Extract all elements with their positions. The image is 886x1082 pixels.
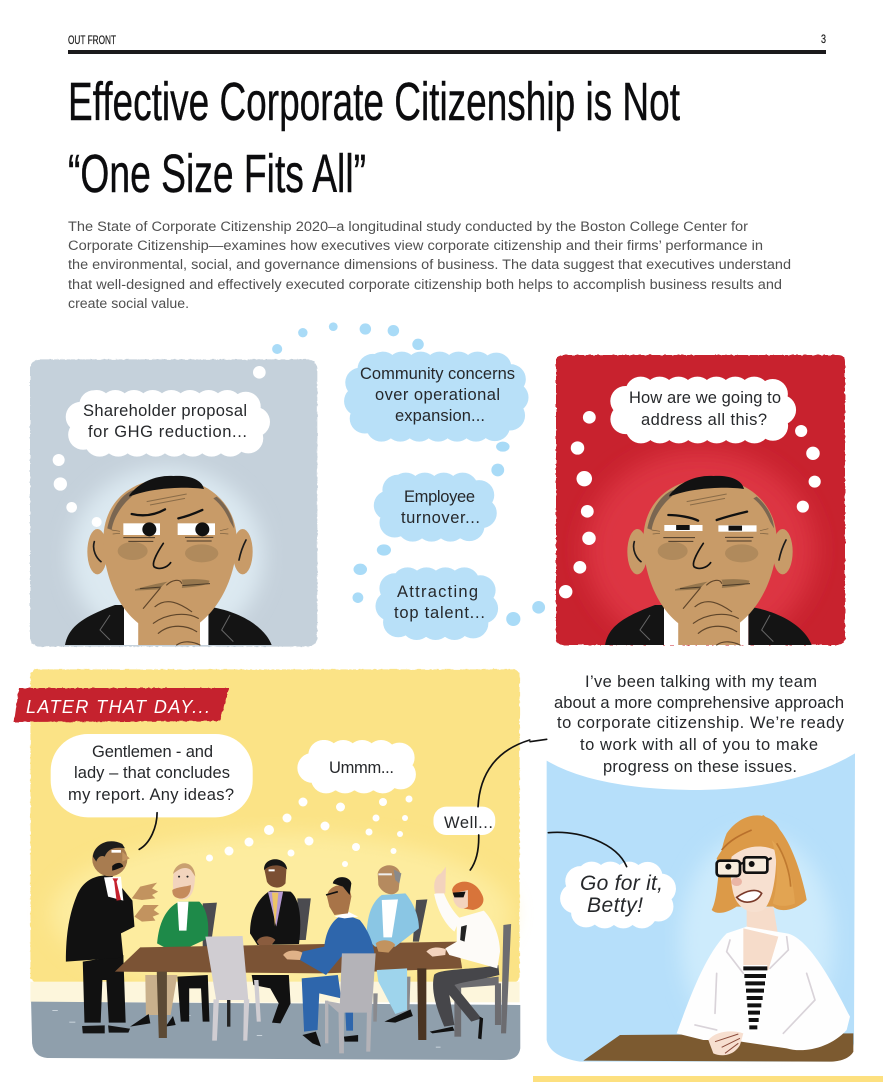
intro text block: Corporate Citizenship—examines how executives view corporate citizenship and their firms’ performance in (68, 238, 763, 253)
panel: blue thought clouds (272, 322, 545, 626)
panel: Betty at the desk: to corporate citizenship. We’re ready (557, 714, 845, 732)
panel: red executive stressed: How are we going to (629, 389, 781, 407)
panel: blue thought clouds: Attracting (397, 583, 478, 601)
blue thought dots (272, 322, 545, 626)
thought dots (559, 411, 821, 598)
bubble tail (139, 813, 157, 849)
panel: yellow meeting room: Ummm... (329, 759, 394, 777)
intro text block: that well-designed and effectively executed corporate citizenship both helps to accomplish business results and (68, 277, 782, 292)
cloud: community concerns (359, 367, 513, 427)
panel: red executive stressed: address all this? (641, 411, 767, 429)
intro text block: create social value. (68, 296, 189, 311)
panel: blue thought clouds: Employee (404, 488, 475, 506)
panel: Betty at the desk: progress on these issues. (603, 758, 797, 776)
title: “One Size Fits All” (68, 144, 366, 204)
executive narrowed eyes (559, 411, 821, 598)
panel: yellow meeting room: Gentlemen - and (92, 743, 213, 761)
page number: 3 (821, 32, 826, 46)
grey chair front right (325, 953, 376, 1053)
panel: Betty at the desk: to work with all of you to make (580, 736, 818, 754)
thought dots (53, 366, 266, 527)
intro text block: The State of Corporate Citizenship 2020–a longitudinal study conducted by the Boston College Center for (68, 219, 749, 234)
grey chair front left (205, 936, 261, 1041)
panel: yellow meeting room: my report. Any ideas? (68, 786, 234, 804)
figure: executive (65, 476, 272, 645)
bubble: Gentlemen (51, 734, 253, 817)
table (115, 942, 462, 1040)
figure: woman's chair (453, 924, 511, 1037)
panel: Betty at the desk (530, 673, 855, 1062)
figure: woman raising hand (426, 867, 500, 1039)
panel: grey executive thinking: for GHG reduction... (88, 423, 247, 441)
panel: blue thought clouds: Community concerns (360, 365, 515, 383)
panel: blue thought clouds: expansion... (395, 407, 485, 425)
banner (14, 688, 229, 722)
figure: Betty (677, 815, 850, 1055)
floor (31, 1002, 520, 1060)
connector line: Well (470, 740, 530, 870)
panel: Betty at the desk: I’ve been talking with my team (585, 673, 817, 691)
figure: standing presenter (66, 841, 159, 1033)
thought dots above the team (206, 796, 412, 867)
cloud: Go for it (575, 877, 662, 913)
wall (30, 669, 520, 983)
next panel strip (533, 1076, 883, 1082)
panel: Betty at the desk: about a more comprehensive approach (554, 694, 844, 712)
executive eyes (123, 509, 215, 536)
cloud: attracting talent (391, 582, 483, 625)
figure: man in blue, back view (283, 877, 374, 1047)
sky background with speech curve (547, 753, 855, 1062)
figure: man in black suit (250, 859, 300, 1023)
panel: yellow meeting room: Well... (444, 814, 493, 832)
chairs behind (203, 898, 427, 1022)
figure: man in green (130, 863, 209, 1027)
cloud: employee turnover (389, 488, 482, 527)
panel: yellow meeting room: lady – that concludes (74, 764, 230, 782)
panel: Betty at the desk: Betty! (587, 894, 643, 917)
figure: man in light blue (367, 865, 419, 1023)
intro text block: the environmental, social, and governance dimensions of business. The data suggest that executives understand (68, 257, 791, 272)
panel: blue thought clouds: top talent... (394, 604, 485, 622)
connector line from Well (530, 739, 547, 742)
speech cloud: shareholder proposal (80, 405, 255, 442)
figure: executive (605, 476, 812, 645)
panel: blue thought clouds: over operational (375, 386, 500, 404)
title (68, 72, 680, 204)
intro text block (68, 219, 791, 311)
speech cloud: how are we going (624, 392, 781, 428)
desk (583, 1033, 853, 1062)
thought cloud: Ummm (313, 755, 404, 778)
bubble: Well (433, 807, 495, 835)
page header label: OUT FRONT (68, 33, 116, 47)
panel: grey executive thinking: Shareholder proposal (83, 402, 247, 420)
panel: yellow meeting room: LATER THAT DAY... (26, 697, 210, 717)
panel: red executive stressed (556, 355, 845, 650)
panel: Betty at the desk: Go for it, (580, 872, 663, 895)
panel: yellow meeting room (14, 669, 530, 1060)
panel: grey executive thinking (30, 359, 317, 647)
panel: blue thought clouds: turnover... (401, 509, 480, 527)
